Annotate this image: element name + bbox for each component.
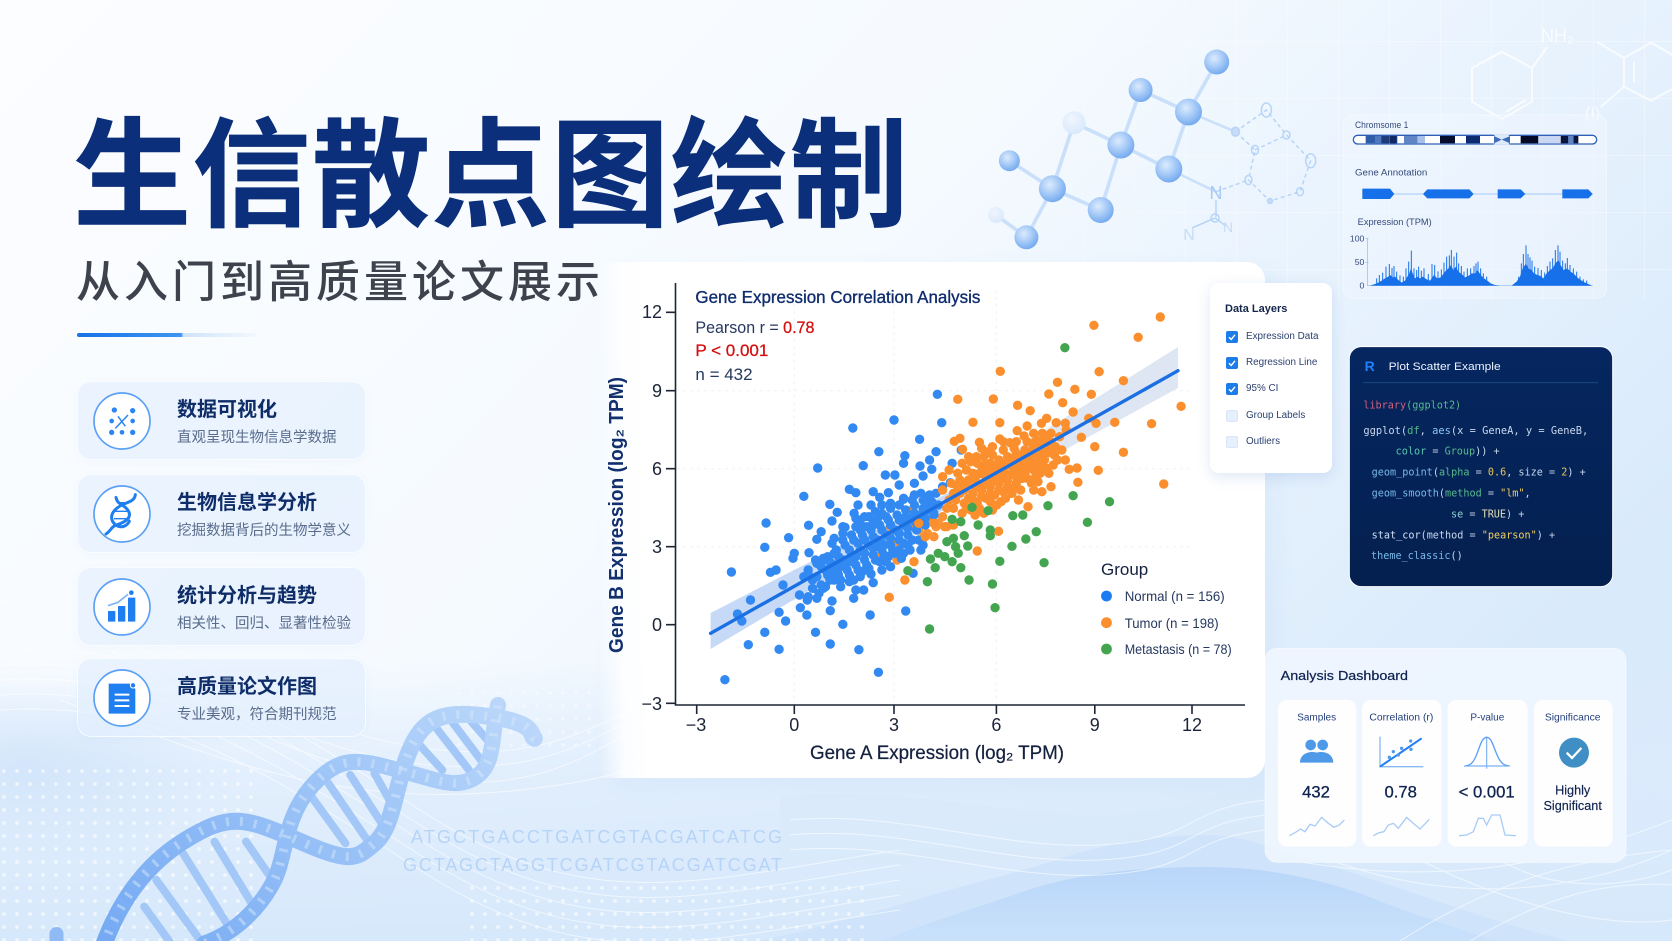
expression track: 0 [1360,281,1365,291]
card description: 挖掘数据背后的生物学意义 [177,523,351,539]
chart title: Gene Expression Correlation Analysis [695,287,981,307]
panel heading: Data Layers [1225,303,1287,315]
layer: outliers [1226,436,1280,448]
panel: R code example [1348,346,1614,588]
x tick labels: 9 [1090,715,1100,735]
grid lines [676,290,1190,705]
gene annotation track: Gene Annotation [1355,168,1427,178]
card heading: 数据可视化 [177,399,277,421]
ring atoms [1183,103,1316,244]
icon: bar trend [93,578,151,636]
expression track: 100 [1350,234,1365,244]
code lines: se = TRUE) + [1451,509,1524,520]
x tick labels: 12 [1182,715,1202,735]
legend: Normal (n = 156) [1125,588,1225,604]
metric: samples [1278,700,1356,847]
x tick labels: −3 [686,715,706,735]
panel: analysis dashboard [1264,648,1626,862]
expression track [1350,217,1593,291]
legend: Group [1101,560,1148,579]
legend: Tumor (n = 198) [1125,615,1219,631]
ring atoms: N [1223,219,1233,235]
code lines: theme_classic() [1371,551,1463,562]
orange points: tumor [889,317,1181,597]
sequence line 2: GCTAGCTAGGTCGATCGTACGATCGAT [403,855,782,875]
inner wave hump [880,867,1495,941]
scatter points [725,317,1181,680]
code lines: color = Group)) + [1396,446,1500,457]
metric: significance: Significance [1545,713,1601,724]
code lines: library(ggplot2) [1363,400,1461,411]
DNA sequence text [403,827,782,875]
layer: regression line: Regression Line [1246,357,1317,368]
accent bar [77,333,257,337]
regression line [711,371,1178,633]
metric: significance [1534,700,1613,847]
metric: p-value: P-value [1470,713,1505,724]
base-pair rungs [144,722,493,941]
outer wave hump [760,835,1570,941]
expression track: Expression (TPM) [1358,217,1432,227]
legend: Metastasis (n = 78) [1125,641,1232,657]
layer: group labels [1226,410,1305,422]
metric: samples: Samples [1297,713,1336,724]
axes [666,283,1245,714]
panel: scatter plot card [600,262,1265,778]
code header: R [1365,358,1375,374]
chromosome track [1353,120,1597,145]
chemical structure line art: (I) [1585,105,1600,122]
card: publication figures [77,658,366,737]
y tick labels [641,302,662,714]
sequence line 1: ATGCTGACCTGATCGTACGATCATCG [411,827,782,847]
y tick labels: −3 [641,694,662,714]
x tick labels: 6 [991,715,1001,735]
title: 生信散点图绘制 [73,111,910,243]
expression track: 50 [1355,257,1365,267]
statistics block [695,318,814,384]
x axis title: Gene A Expression (log₂ TPM) [810,742,1064,764]
metric: significance: Significant [1543,799,1602,813]
statistics block: P < 0.001 [695,341,768,360]
confidence band [711,347,1178,649]
card heading: 统计分析与趋势 [177,585,317,607]
card heading: 高质量论文作图 [177,676,317,698]
x tick labels: 3 [889,715,899,735]
metric: significance: Highly [1555,783,1591,797]
panel: genome tracks [1343,114,1607,298]
ring atoms: N [1183,227,1195,244]
layer: group labels: Group Labels [1246,410,1305,421]
subtitle: 从入门到高质量论文展示 [76,258,604,307]
icon: DNA [93,485,151,543]
metric: correlation [1362,700,1441,847]
statistics block: Pearson r = 0.78 [695,318,814,337]
metric: correlation: Correlation (r) [1369,713,1433,724]
card description: 直观呈现生物信息学数据 [177,430,336,446]
panel: data layers [1210,283,1332,473]
orange points behind [878,495,947,560]
card description: 专业美观，符合期刊规范 [177,707,336,723]
y tick labels: 6 [652,459,662,479]
layer: outliers: Outliers [1246,436,1280,447]
x tick labels: 0 [789,715,799,735]
metric: correlation: 0.78 [1384,782,1417,801]
molecule illustration [988,26,1672,250]
y axis title: Gene B Expression (log₂ TPM) [606,377,628,653]
scatter chart [606,283,1245,764]
code lines: ggplot(df, aes(x = GeneA, y = GeneB, [1363,426,1588,437]
card description: 相关性、回归、显著性检验 [177,616,351,632]
legend [1101,560,1232,657]
y tick labels: 12 [642,302,662,322]
y tick labels: 3 [652,537,662,557]
card: data visualization [77,381,366,460]
statistics block: n = 432 [695,365,753,384]
dashboard title: Analysis Dashboard [1281,668,1408,683]
chemical structure line art: NH₂ [1541,26,1574,46]
icon: document [93,669,151,727]
DNA helix illustration [50,697,543,941]
blue points: normal [725,394,961,680]
code header: Plot Scatter Example [1389,361,1501,373]
y tick labels: 9 [652,381,662,401]
code lines: geom_point(alpha = 0.6, size = 2) + [1372,467,1586,478]
card: statistics [77,567,366,646]
gene annotation track [1355,168,1593,199]
card: bioinformatics analysis [77,474,366,553]
layer: confidence interval [1226,383,1278,395]
card heading: 生物信息学分析 [177,492,317,514]
code lines: geom_smooth(method = "lm", [1372,488,1531,499]
metric: p-value [1448,700,1528,847]
code lines [1363,400,1588,562]
metric: samples: 432 [1302,782,1330,801]
code header [1363,358,1598,383]
layer: expression data: Expression Data [1246,331,1318,342]
panel: feature cards [77,382,366,737]
y tick labels: 0 [652,615,662,635]
ring atoms: N [1210,183,1222,203]
chromosome track: Chromsome 1 [1355,120,1408,130]
chemical structure line art [1472,26,1672,122]
x tick labels [686,715,1202,735]
code lines: stat_cor(method = "pearson") + [1372,530,1555,541]
metric: p-value: < 0.001 [1459,782,1515,801]
green points: metastasis [908,348,1110,629]
layer: confidence interval: 95% CI [1246,383,1278,394]
icon: scatter [93,392,151,450]
